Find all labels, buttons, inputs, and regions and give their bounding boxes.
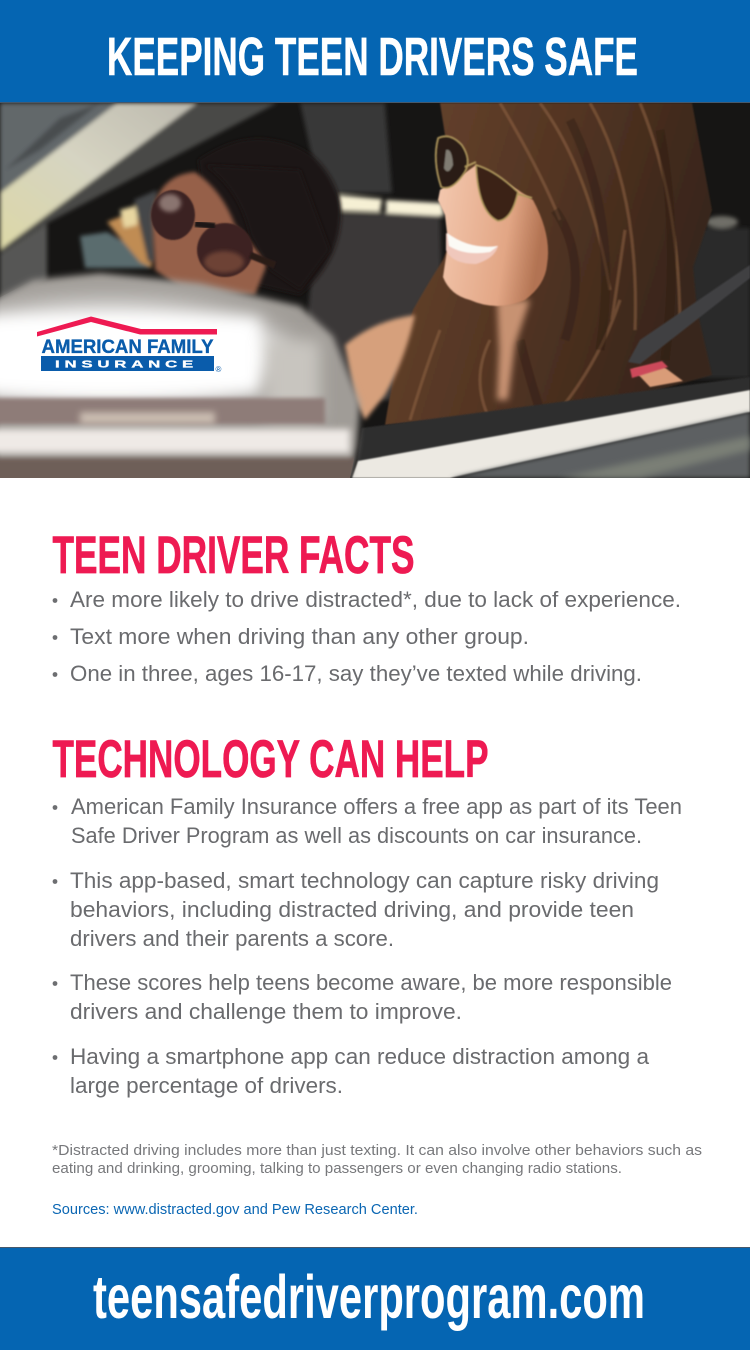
list: technology can help: This app-based, smart technology can capture risky driving bbox=[70, 868, 659, 893]
heading: technology can help: TECHNOLOGY CAN HELP bbox=[52, 730, 488, 789]
list: technology can help: large percentage of drivers. bbox=[70, 1073, 343, 1098]
list: technology can help: Having a smartphone app can reduce distraction among a bbox=[70, 1044, 649, 1069]
list: teen driver facts: Text more when driving than any other group. bbox=[70, 624, 529, 649]
header banner bbox=[0, 0, 750, 103]
photo: two young women smiling in a car bbox=[0, 103, 750, 488]
side mirror bbox=[0, 273, 370, 488]
driver woman hair bbox=[385, 103, 712, 425]
list: technology can help: Safe Driver Program as well as discounts on car insurance. bbox=[71, 823, 642, 848]
car pillar and window bbox=[0, 103, 277, 310]
footer banner bbox=[0, 1247, 750, 1350]
driver woman neck and shoulders bbox=[345, 300, 683, 420]
driver seatbelt bbox=[628, 265, 750, 378]
logo: American Family Insurance: INSURANCE bbox=[55, 358, 198, 370]
list: technology can help: These scores help teens become aware, be more responsible bbox=[70, 970, 672, 995]
list: teen driver facts: Are more likely to drive distracted*, due to lack of experience. bbox=[70, 587, 681, 612]
registered mark: ® bbox=[216, 365, 222, 374]
sources: Sources: www.distracted.gov and Pew Research Center. bbox=[52, 1201, 418, 1218]
list: technology can help bbox=[53, 794, 682, 1098]
list: technology can help: American Family Insurance offers a free app as part of its Teen bbox=[71, 794, 682, 819]
logo wordmark: AMERICAN FAMILY bbox=[42, 337, 214, 358]
list: technology can help: drivers and their parents a score. bbox=[70, 926, 394, 951]
car door bbox=[352, 377, 750, 478]
footnote bbox=[52, 1142, 702, 1177]
list: teen driver facts bbox=[53, 587, 681, 686]
driver woman sunglasses bbox=[436, 136, 532, 221]
logo insurance bar bbox=[41, 356, 214, 371]
headrest and seat bbox=[300, 103, 750, 400]
heading: teen driver facts: TEEN DRIVER FACTS bbox=[52, 526, 414, 585]
logo: American Family Insurance bbox=[37, 316, 222, 374]
footnote: *Distracted driving includes more than just texting. It can also involve other behaviors such as bbox=[52, 1142, 702, 1159]
list: technology can help: drivers and challenge them to improve. bbox=[70, 999, 462, 1024]
logo roof bbox=[37, 316, 217, 336]
list: teen driver facts: One in three, ages 16-17, say they’ve texted while driving. bbox=[70, 661, 642, 686]
driver woman face bbox=[438, 165, 548, 306]
footnote: eating and drinking, grooming, talking to passengers or even changing radio stations. bbox=[52, 1160, 622, 1177]
list: technology can help: behaviors, including distracted driving, and provide teen bbox=[70, 897, 634, 922]
passenger woman bbox=[151, 138, 341, 295]
